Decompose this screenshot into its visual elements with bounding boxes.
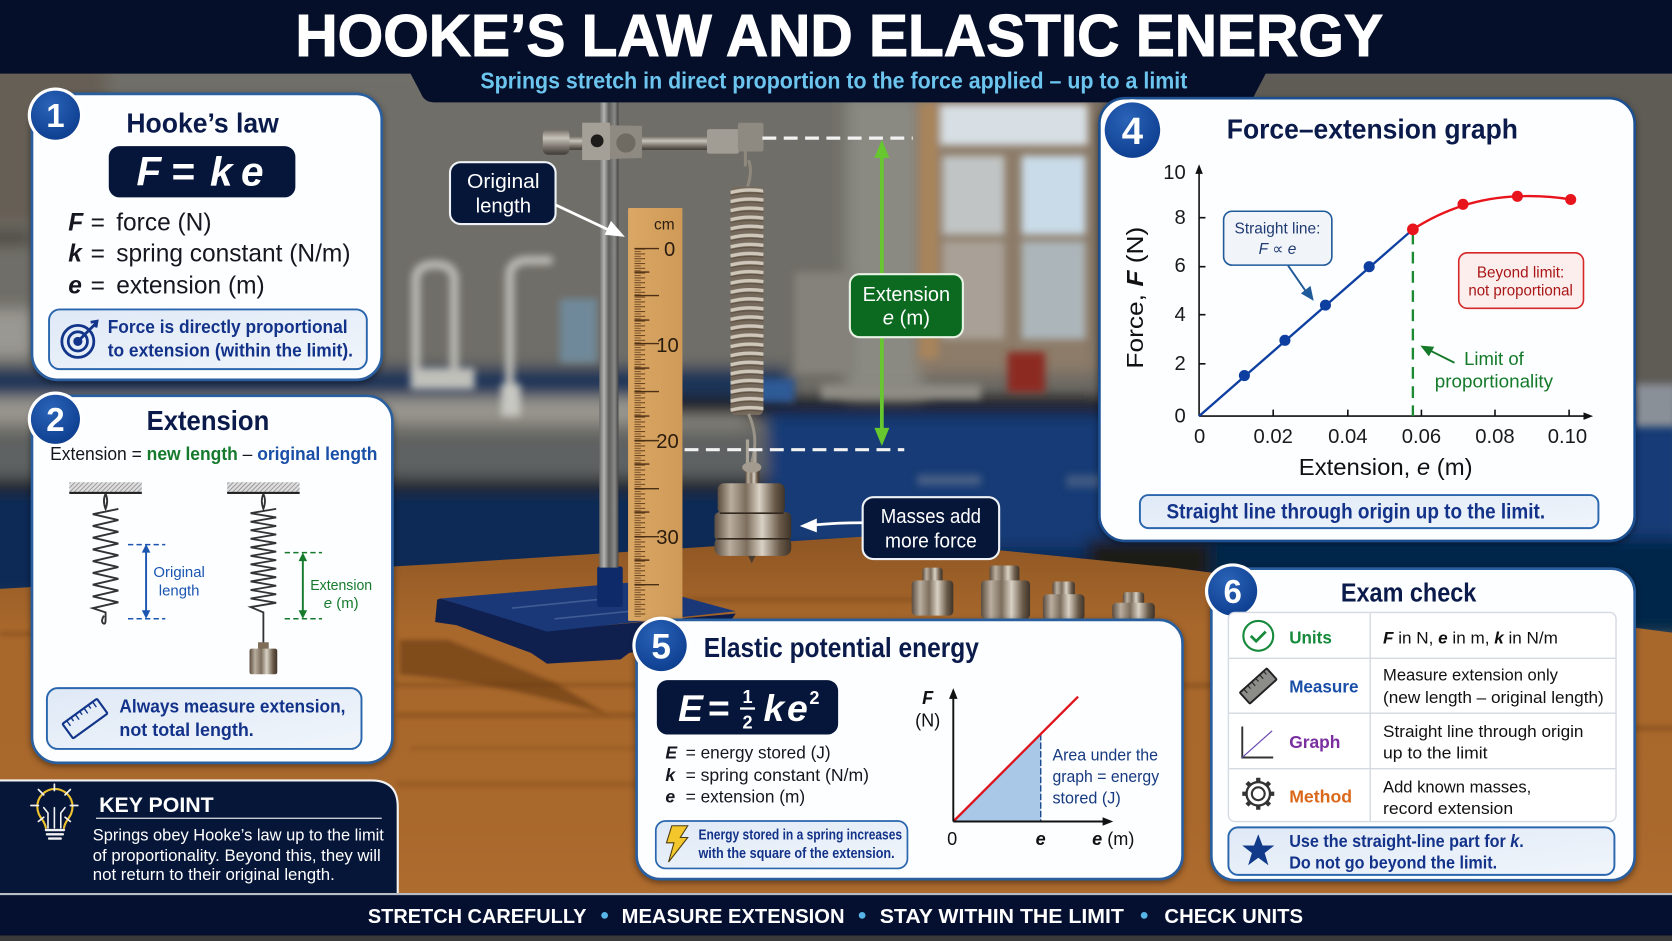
ruler: 10 bbox=[656, 335, 679, 357]
callout: to extension (within the limit). bbox=[108, 339, 353, 360]
body text: Springs obey Hooke’s law up to the limit bbox=[93, 826, 384, 845]
definitions: extension (m) bbox=[116, 272, 265, 299]
stand base bbox=[435, 567, 736, 664]
row: units bbox=[1243, 621, 1558, 651]
annotation: graph = energy bbox=[1052, 767, 1160, 786]
panel 2: Extension bbox=[28, 392, 392, 763]
callout bbox=[1228, 827, 1614, 875]
badge 2: 2 bbox=[46, 402, 65, 439]
label: limit of proportionality: proportionality bbox=[1435, 371, 1554, 391]
axis titles: Extension, e (m) bbox=[1299, 454, 1473, 480]
panel 5: elastic potential energy bbox=[632, 617, 1183, 879]
callout bbox=[656, 821, 907, 868]
arrow: original length to ruler bbox=[556, 205, 625, 237]
heading: Hooke’s law bbox=[126, 107, 279, 138]
label: original length bbox=[450, 162, 556, 224]
ruler: 30 bbox=[656, 527, 679, 549]
row: method: Add known masses, bbox=[1383, 778, 1531, 797]
formula box: E bbox=[678, 687, 704, 729]
icon: mini graph bbox=[1242, 727, 1273, 757]
callout: Do not go beyond the limit. bbox=[1289, 852, 1497, 872]
callout: Straight line through origin up to the limit. bbox=[1167, 501, 1545, 524]
label: extension bbox=[850, 274, 963, 337]
badge 6: 6 bbox=[1223, 574, 1242, 611]
definitions: extension (m) bbox=[701, 786, 805, 806]
spare masses on table bbox=[912, 565, 1155, 620]
chart: area under graph: (N) bbox=[915, 711, 940, 731]
label: masses: Masses add bbox=[881, 506, 981, 528]
heading: Exam check bbox=[1341, 580, 1477, 608]
callout: Always measure extension, bbox=[119, 696, 345, 717]
footer band: CHECK UNITS bbox=[1164, 906, 1303, 928]
ruler bbox=[628, 208, 682, 621]
panel: key point bbox=[0, 780, 398, 896]
chart: area under graph: e (m) bbox=[1092, 829, 1134, 849]
formula box: e bbox=[241, 149, 264, 195]
callout bbox=[1140, 495, 1598, 528]
definitions: = bbox=[91, 240, 105, 267]
body text: of proportionality. Beyond this, they will bbox=[93, 846, 381, 865]
formula box: 2 bbox=[809, 688, 819, 708]
axis tick labels: 6 bbox=[1174, 255, 1186, 277]
label: original length: length bbox=[476, 195, 531, 217]
definitions: F bbox=[68, 209, 84, 236]
chart: force against extension: 0.10 bbox=[1548, 426, 1587, 448]
definitions bbox=[68, 209, 351, 299]
panel 1: Hooke's law bbox=[28, 87, 382, 380]
arrow: straight line bbox=[1288, 266, 1314, 301]
chart: force against extension: 0.04 bbox=[1328, 426, 1368, 448]
diagram: stretched spring with mass bbox=[227, 482, 300, 674]
row: units: F in N, e in m, k in N/m bbox=[1383, 628, 1558, 647]
definitions: energy stored (J) bbox=[701, 743, 831, 763]
label: original length: Original bbox=[467, 171, 540, 193]
chart: force against extension: 0.02 bbox=[1253, 426, 1293, 448]
definitions: E bbox=[665, 743, 678, 763]
row: measure bbox=[1240, 666, 1604, 707]
formula box: k bbox=[210, 149, 235, 195]
badge 4 bbox=[1102, 99, 1163, 161]
dashed reference lines bbox=[685, 138, 913, 450]
callout bbox=[49, 309, 367, 369]
checklist table bbox=[1228, 612, 1616, 822]
formula box: 2 bbox=[742, 713, 753, 733]
row: graph bbox=[1242, 722, 1583, 763]
arrow: extension: Extension bbox=[310, 577, 372, 594]
formula box bbox=[109, 146, 295, 197]
chart: force against extension: 0.08 bbox=[1475, 426, 1515, 448]
definitions bbox=[665, 743, 869, 806]
definitions: = bbox=[91, 272, 105, 299]
axis tick labels: 4 bbox=[1174, 304, 1186, 326]
annotation bbox=[1052, 746, 1160, 807]
badge 2 bbox=[28, 392, 83, 447]
chart: area under graph bbox=[915, 688, 1160, 849]
chart: area under graph: e bbox=[1036, 829, 1046, 849]
clamp arm bbox=[543, 123, 763, 160]
formula box: k bbox=[763, 687, 786, 729]
green extension arrow bbox=[874, 140, 889, 446]
badge 1 bbox=[28, 87, 83, 143]
axis tick labels: 8 bbox=[1174, 207, 1186, 229]
body text bbox=[93, 826, 384, 884]
ruler: 20 bbox=[656, 431, 679, 453]
callout: beyond limit: not proportional bbox=[1468, 283, 1573, 300]
equation: Extension = new length – original length bbox=[50, 443, 377, 464]
row: graph: Graph bbox=[1289, 732, 1340, 752]
non-proportional curve and points bbox=[1407, 191, 1576, 235]
title: HOOKE’S LAW AND ELASTIC ENERGY bbox=[295, 2, 1383, 69]
definitions: k bbox=[665, 765, 676, 785]
axes bbox=[1199, 171, 1587, 416]
arrow: masses bbox=[800, 519, 863, 532]
ruler: cm bbox=[654, 216, 675, 233]
annotation: stored (J) bbox=[1052, 788, 1121, 807]
callout: straight line: Straight line: bbox=[1235, 221, 1320, 238]
row: method: record extension bbox=[1383, 799, 1513, 818]
chart: force against extension: 0 bbox=[1194, 426, 1205, 448]
formula box: F bbox=[136, 149, 162, 195]
footer band: STAY WITHIN THE LIMIT bbox=[880, 906, 1125, 928]
axis tick labels bbox=[1163, 162, 1186, 427]
chart: area under graph: F bbox=[922, 688, 934, 708]
wood grain bbox=[0, 597, 1672, 787]
badge 1: 1 bbox=[46, 98, 65, 135]
stand rod bbox=[599, 102, 618, 568]
icon: ruler bbox=[62, 699, 108, 739]
icon: target bbox=[62, 321, 97, 357]
definitions: = bbox=[686, 765, 696, 785]
retort stand with ruler, spring and masses bbox=[435, 102, 1155, 664]
heading: Elastic potential energy bbox=[704, 632, 979, 663]
formula box: 1 bbox=[742, 687, 753, 707]
formula box: = bbox=[708, 687, 730, 729]
axis tick labels: 10 bbox=[1163, 162, 1186, 184]
icon: check bbox=[1243, 621, 1273, 651]
wooden table top bbox=[0, 537, 1672, 941]
row: measure: Measure extension only bbox=[1383, 666, 1558, 685]
definitions: e bbox=[68, 272, 82, 299]
axis tick labels: 2 bbox=[1174, 353, 1186, 375]
callout: beyond limit: Beyond limit: bbox=[1477, 264, 1564, 281]
callout: Energy stored in a spring increases bbox=[698, 828, 902, 844]
ruler: 0 bbox=[664, 239, 675, 261]
definitions: = bbox=[686, 743, 696, 763]
row: graph: up to the limit bbox=[1383, 744, 1488, 763]
subtitle: Springs stretch in direct proportion to the force applied – up to a limit bbox=[480, 68, 1188, 94]
arrow: original length: length bbox=[159, 582, 199, 599]
row: method bbox=[1242, 778, 1531, 818]
row: measure: (new length – original length) bbox=[1383, 688, 1604, 707]
callout: beyond limit bbox=[1459, 253, 1583, 308]
formula box: e bbox=[787, 687, 808, 729]
hanging masses bbox=[714, 462, 791, 563]
badge 6 bbox=[1205, 563, 1260, 619]
icon: gear bbox=[1242, 778, 1274, 810]
chart: force against extension: Force, F (N) bbox=[1122, 227, 1148, 369]
callout: straight line: F ∝ e bbox=[1259, 241, 1297, 258]
callout bbox=[47, 688, 361, 749]
label: extension: Extension bbox=[863, 284, 950, 306]
heading: Force–extension graph bbox=[1227, 114, 1518, 145]
arrow: original length: Original bbox=[153, 564, 205, 581]
arrow: extension: e (m) bbox=[324, 595, 359, 612]
formula box: = bbox=[172, 149, 195, 195]
header band bbox=[0, 0, 1672, 102]
body text: not return to their original length. bbox=[93, 865, 335, 884]
arrow: original length bbox=[128, 544, 205, 619]
definitions: e bbox=[665, 786, 675, 806]
annotation: Area under the bbox=[1052, 746, 1158, 765]
footer band bbox=[0, 893, 1672, 941]
badge 5: 5 bbox=[651, 627, 671, 666]
axis tick labels: 0 bbox=[1174, 405, 1186, 427]
definitions: = bbox=[91, 209, 105, 236]
chart: force against extension bbox=[1122, 162, 1593, 480]
callout: straight line bbox=[1224, 211, 1332, 265]
badge 5 bbox=[632, 617, 690, 674]
definitions: k bbox=[68, 240, 83, 267]
formula box bbox=[657, 680, 838, 735]
panel 6: exam check bbox=[1205, 563, 1635, 880]
panel 4: force-extension graph bbox=[1099, 98, 1635, 541]
callout: with the square of the extension. bbox=[698, 846, 895, 862]
icon: light bulb bbox=[31, 784, 78, 839]
row: method: Method bbox=[1289, 786, 1352, 806]
heading: Extension bbox=[147, 405, 269, 436]
limit dashed line bbox=[1412, 233, 1414, 416]
row: units: Units bbox=[1289, 627, 1332, 647]
arrow: extension bbox=[285, 553, 372, 619]
proportional line and points bbox=[1199, 229, 1413, 416]
row: graph: Straight line through origin bbox=[1383, 722, 1583, 741]
definitions: spring constant (N/m) bbox=[116, 240, 351, 267]
footer band: STRETCH CAREFULLY bbox=[368, 906, 587, 928]
callout: Force is directly proportional bbox=[108, 316, 348, 337]
definitions: spring constant (N/m) bbox=[701, 765, 869, 785]
label: extension: e (m) bbox=[883, 307, 930, 329]
definitions: = bbox=[686, 786, 696, 806]
label: masses: more force bbox=[885, 530, 977, 552]
row: measure: Measure bbox=[1289, 676, 1359, 696]
icon: star bbox=[1242, 834, 1274, 865]
icon: lightning bolt bbox=[666, 826, 688, 862]
label: masses bbox=[863, 497, 999, 559]
diagram: unstretched spring bbox=[69, 482, 142, 624]
label: limit of proportionality bbox=[1420, 346, 1554, 391]
spring bbox=[730, 151, 763, 467]
chart: area under graph: 0 bbox=[947, 829, 957, 849]
heading: KEY POINT bbox=[99, 793, 214, 817]
chart: force against extension: 0.06 bbox=[1402, 426, 1441, 448]
badge 4: 4 bbox=[1122, 110, 1144, 153]
definitions: force (N) bbox=[116, 209, 212, 236]
label: limit of proportionality: Limit of bbox=[1464, 349, 1525, 369]
footer band: MEASURE EXTENSION bbox=[622, 906, 845, 928]
callout: not total length. bbox=[119, 719, 254, 740]
callout: Use the straight-line part for k. bbox=[1289, 831, 1524, 851]
icon: ruler bbox=[1240, 668, 1277, 704]
